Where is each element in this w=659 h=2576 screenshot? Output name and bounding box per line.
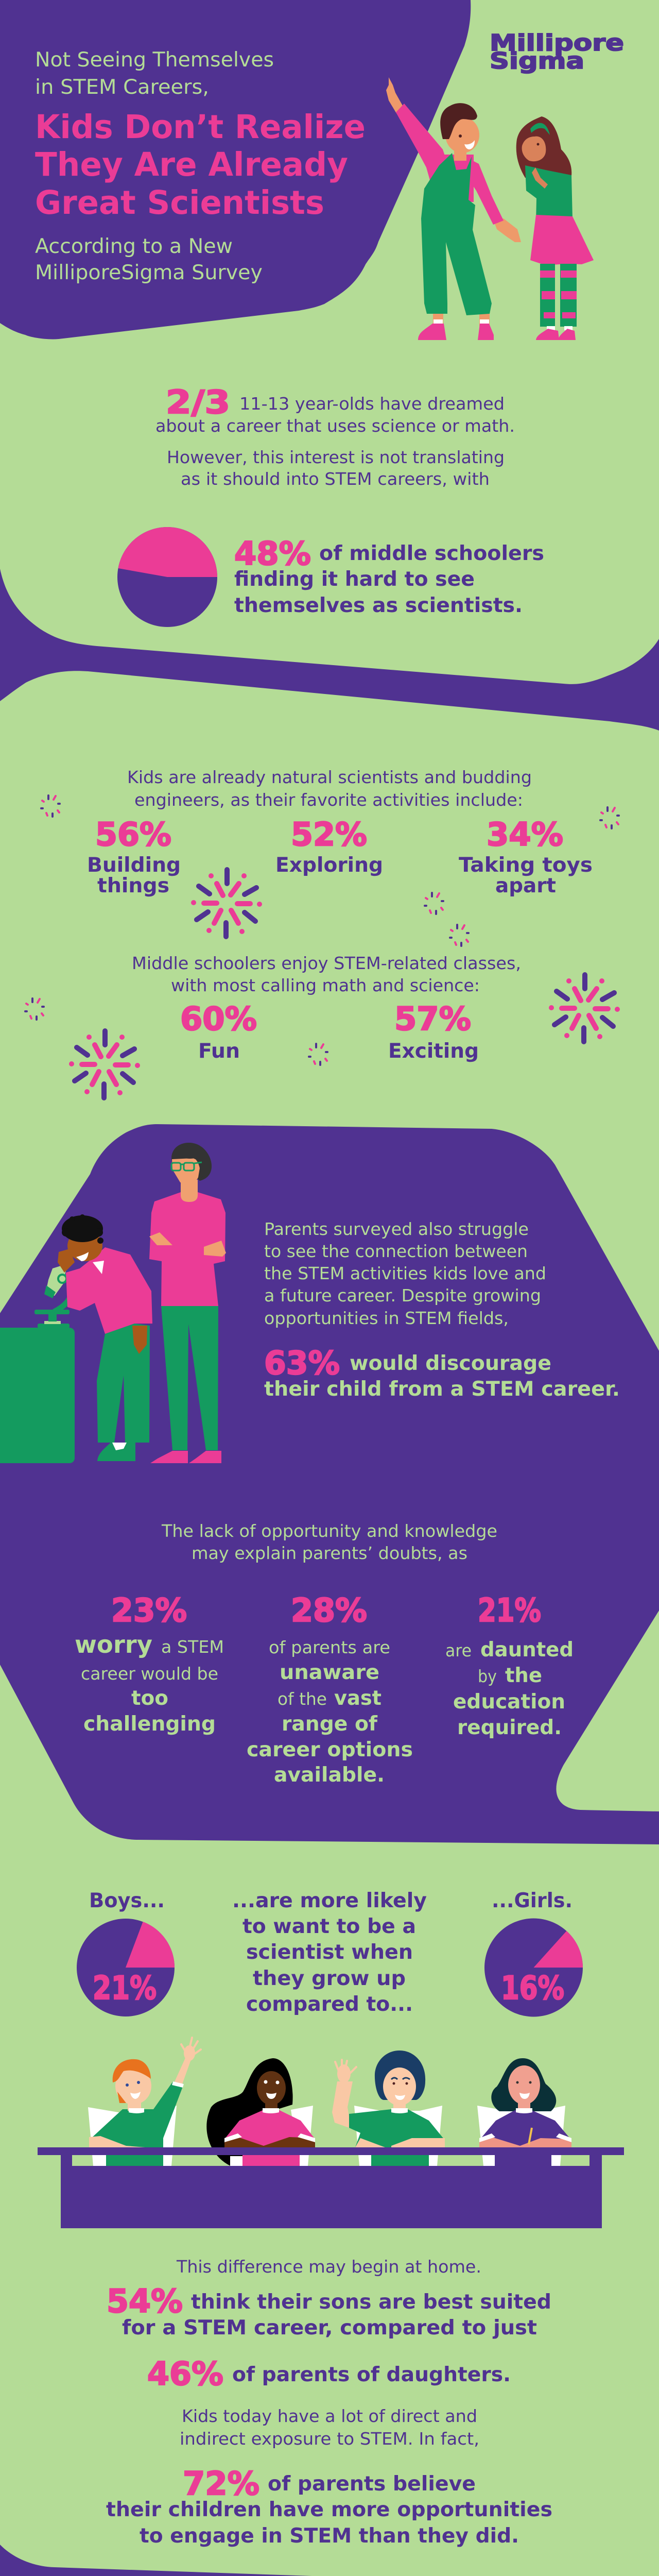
text: more likely: to want to be a (242, 1915, 416, 1938)
stat: 63% would discourage: would discourage (350, 1352, 551, 1375)
illustration: parent and child at microscope (0, 1143, 226, 1463)
text: more likely (232, 1889, 427, 2016)
text: more likely: ...are more likely (232, 1889, 427, 1912)
stat: 28% unaware: unaware (280, 1661, 379, 1684)
stat: 56% building things: Building (87, 854, 181, 877)
text: two thirds (155, 383, 515, 489)
panel: parents (0, 1124, 659, 1844)
heading: intro (35, 48, 274, 99)
title: Kids Don’t Realize (35, 108, 366, 146)
stat: 23% worry (75, 1591, 224, 1736)
stat: 72% parents believe: their children have more opportunities (106, 2498, 552, 2521)
stat: 54% sons: 54% (107, 2282, 183, 2320)
stat: 28% unaware: range of (282, 1713, 378, 1736)
text: parents struggle (264, 1219, 546, 1328)
stat: 21% daunted: 21% (478, 1591, 541, 1629)
stat: 28% unaware (247, 1591, 413, 1787)
text: kids today: Kids today have a lot of direct and (182, 2406, 477, 2426)
stat: 52% exploring: 52% (291, 816, 367, 853)
illustration: student with long black hair (206, 2058, 315, 2166)
heading: boys: Boys... (89, 1889, 165, 1912)
text: 48% of middle schoolers: finding it hard to see (234, 568, 475, 591)
text: favorite activities intro (127, 767, 532, 810)
title: Great Scientists (35, 184, 324, 222)
illustration: boy pointing (386, 77, 521, 340)
stat: 56% building things: things (97, 874, 169, 897)
stat: 56% building things (87, 816, 181, 897)
stat: 21% daunted (445, 1591, 574, 1739)
stat: 28% unaware: career options (247, 1738, 413, 1761)
panel: desk (38, 2147, 624, 2228)
stat: 28% unaware: of parents are (269, 1637, 390, 1657)
stat: 46% daughters: of parents of daughters. (232, 2363, 511, 2386)
stat: 23% worry: worry (75, 1631, 152, 1658)
subtitle: MilliporeSigma Survey (35, 261, 263, 284)
logo: MilliporeSigma: Sigma (490, 48, 584, 74)
heading: girls: ...Girls. (492, 1889, 573, 1912)
heading: intro: Not Seeing Themselves (35, 48, 274, 72)
stat: 23% worry: a STEM (161, 1637, 224, 1657)
stat: 23% worry: career would be (81, 1664, 218, 1684)
text: enjoy classes intro: Middle schoolers enjoy STEM-related classes, (132, 953, 521, 973)
stat: 63% would discourage: their child from a STEM career. (264, 1378, 620, 1401)
text: parents struggle: to see the connection between (264, 1241, 528, 1261)
text: difference begins at home: This difference may begin at home. (176, 2257, 481, 2277)
panel: purple divider band (0, 569, 659, 731)
stat: 63% would discourage (264, 1344, 620, 1401)
stat: 34% taking toys apart (459, 816, 593, 897)
stat: 46% daughters (147, 2355, 511, 2393)
subtitle (35, 235, 263, 284)
text: two thirds: about a career that uses science or math. (155, 416, 515, 436)
stat: 72% parents believe (106, 2465, 552, 2548)
text: parents struggle: opportunities in STEM fields, (264, 1308, 509, 1328)
pie chart: girls 16%: 16% (501, 1969, 564, 2007)
stat: 60% fun (180, 1000, 257, 1063)
stat: 21% daunted: required. (457, 1716, 562, 1739)
logo: MilliporeSigma (490, 30, 624, 74)
pie chart: girls 16% (484, 1919, 583, 2016)
pie chart: boys 21%: 21% (93, 1969, 157, 2007)
stat: 54% sons: think their sons are best suited (191, 2291, 551, 2314)
stat: 56% building things: 56% (95, 816, 171, 853)
stat: 63% would discourage: 63% (264, 1344, 340, 1382)
stat: 21% daunted: by (478, 1666, 497, 1686)
stat: 28% unaware: 28% (291, 1591, 367, 1629)
stat: 28% unaware: of the (278, 1689, 327, 1709)
stat: 60% fun: 60% (180, 1000, 257, 1038)
subtitle: According to a New (35, 235, 233, 258)
text: 48% of middle schoolers: 48% (234, 535, 311, 572)
stat: 57% exciting (388, 1000, 479, 1063)
text: kids today (180, 2406, 479, 2449)
stat: 72% parents believe: of parents believe (268, 2472, 476, 2496)
stat: 52% exploring: Exploring (275, 854, 383, 877)
stat: 34% taking toys apart: Taking toys (459, 854, 593, 877)
pie chart: 48% (117, 527, 217, 627)
stat: 34% taking toys apart: apart (495, 874, 556, 897)
text: kids today: indirect exposure to STEM. In fact, (180, 2429, 479, 2449)
stat: 34% taking toys apart: 34% (487, 816, 563, 853)
illustration: student with navy hair (332, 2050, 445, 2166)
text: two thirds: However, this interest is not translating (167, 447, 505, 467)
stat: 21% daunted: are (445, 1640, 472, 1660)
stat: 21% daunted: daunted (480, 1638, 574, 1662)
stat: 23% worry: 23% (111, 1591, 187, 1629)
illustration: student with orange hair (88, 2038, 201, 2166)
stat: 54% sons: for a STEM career, compared to just (122, 2316, 537, 2340)
text: more likely: compared to... (246, 1993, 413, 2016)
text: enjoy classes intro: with most calling math and science: (171, 975, 480, 995)
stat: 72% parents believe: to engage in STEM than they did. (140, 2524, 519, 2548)
text: parents struggle: Parents surveyed also struggle (264, 1219, 529, 1239)
stat: 28% unaware: vast (334, 1687, 381, 1710)
text: favorite activities intro: Kids are already natural scientists and budding (127, 767, 532, 787)
text: more likely: scientist when (246, 1941, 413, 1964)
stat: 57% exciting: Exciting (388, 1040, 479, 1063)
text: 48% of middle schoolers: of middle schoolers (319, 542, 544, 565)
text: lack of opportunity: The lack of opportunity and knowledge (161, 1521, 497, 1541)
panel: header blob (0, 0, 471, 339)
title: They Are Already (35, 146, 348, 183)
text: parents struggle: a future career. Despite growing (264, 1285, 541, 1306)
stat: 21% daunted: education (453, 1690, 565, 1714)
text: two thirds: 11-13 year-olds have dreamed (239, 394, 505, 414)
text: 48% of middle schoolers: themselves as scientists. (234, 594, 523, 617)
stat: 21% daunted: the (505, 1664, 542, 1687)
stat: 52% exploring (275, 816, 383, 877)
text: lack of opportunity (161, 1521, 497, 1563)
illustration: student with dark teal hair (477, 2058, 571, 2166)
icons: sparkles (25, 795, 620, 1098)
text: two thirds: as it should into STEM careers, with (181, 469, 490, 489)
text: enjoy classes intro (132, 953, 521, 995)
text: lack of opportunity: may explain parents’ doubts, as (192, 1543, 467, 1563)
stat: 23% worry: challenging (83, 1713, 216, 1736)
text: parents struggle: the STEM activities kids love and (264, 1263, 546, 1283)
stat: 57% exciting: 57% (394, 1000, 471, 1038)
pie chart: boys 21% (77, 1919, 175, 2016)
text: two thirds: 2/3 (166, 383, 230, 421)
stat: 46% daughters: 46% (147, 2355, 223, 2393)
panel: school section (0, 2545, 659, 2576)
text: 48% of middle schoolers (234, 535, 544, 617)
stat: 54% sons (107, 2282, 551, 2340)
logo: MilliporeSigma: Millipore (490, 30, 624, 56)
stat: 72% parents believe: 72% (183, 2465, 259, 2502)
stat: 60% fun: Fun (198, 1040, 240, 1063)
stat: 23% worry: too (131, 1687, 168, 1710)
heading: intro: in STEM Careers, (35, 76, 209, 99)
text: more likely: they grow up (253, 1967, 406, 1990)
title (35, 108, 366, 222)
illustration: girl (516, 116, 594, 340)
stat: 28% unaware: available. (274, 1764, 385, 1787)
text: favorite activities intro: engineers, as their favorite activities include: (134, 790, 523, 810)
